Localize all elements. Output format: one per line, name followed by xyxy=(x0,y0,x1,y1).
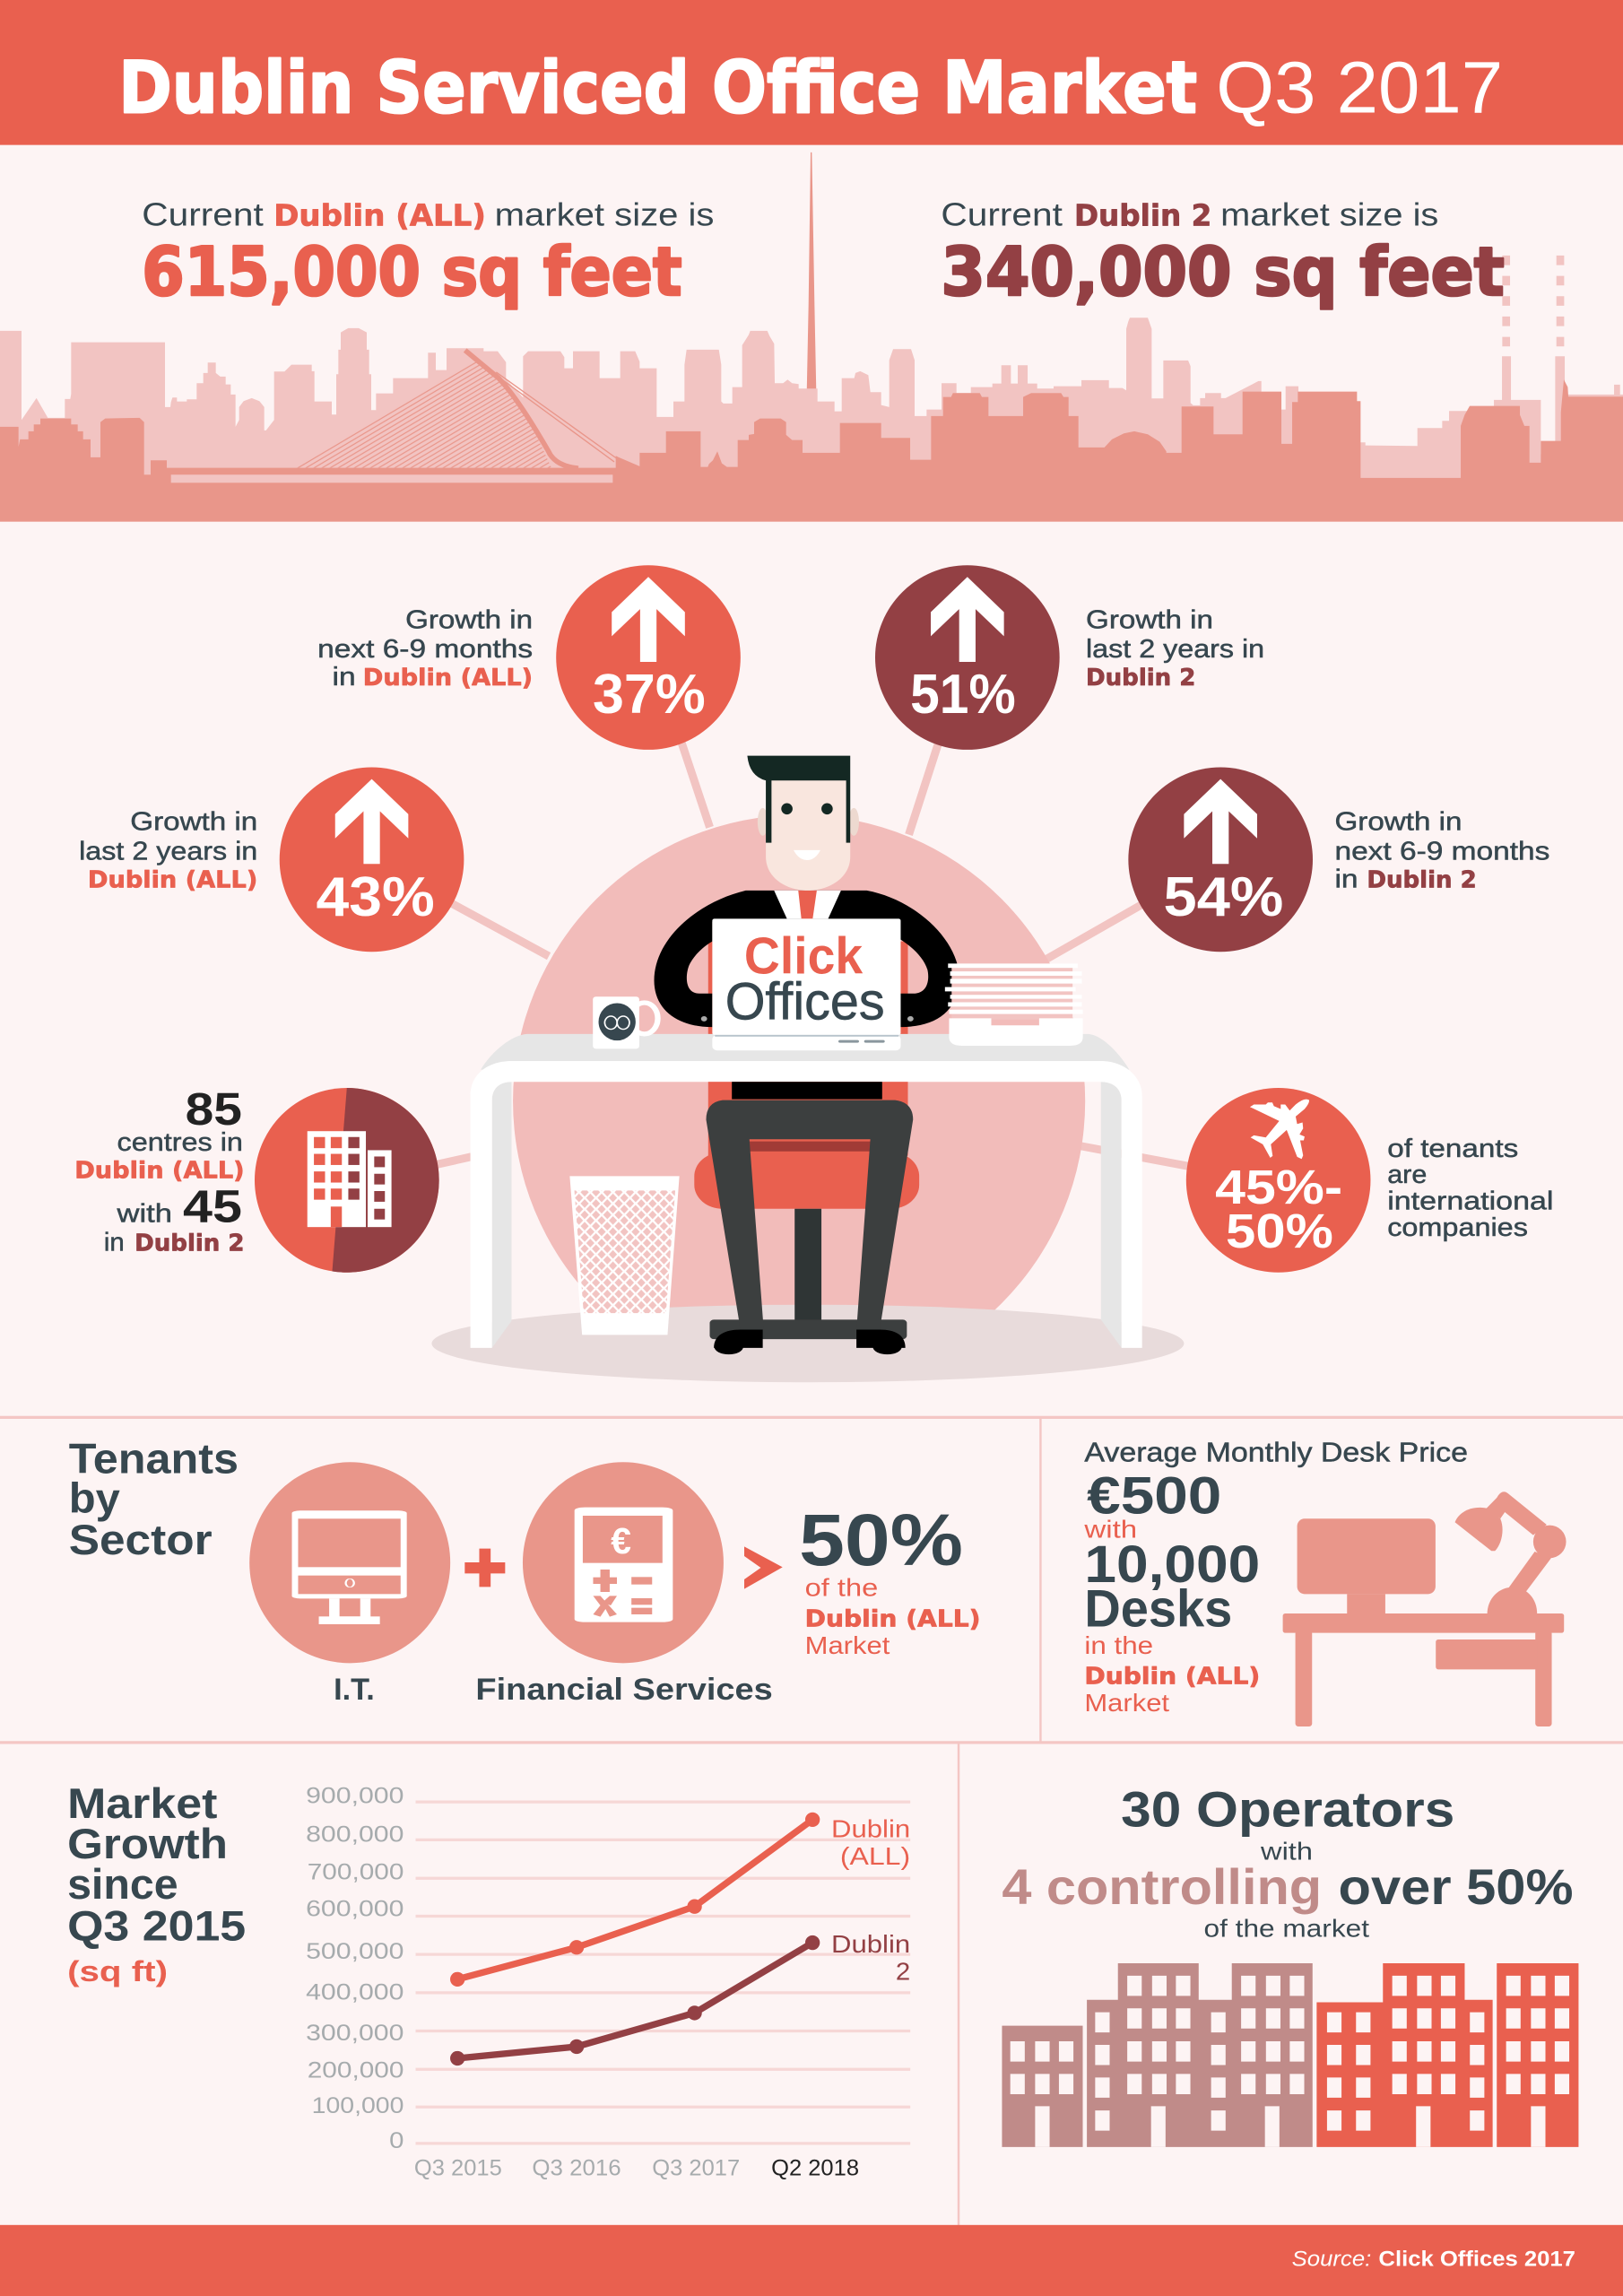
desk price text: in the xyxy=(1084,1631,1153,1659)
chair xyxy=(694,1082,919,1354)
heading: market growth: Q3 2015 xyxy=(67,1902,246,1950)
stat: 43% xyxy=(280,768,464,952)
market size: Dublin 2: 340,000 sq feet xyxy=(941,232,1505,311)
y axis labels: 800,000 xyxy=(306,1822,404,1847)
title: Dublin Serviced Office Market xyxy=(118,47,1197,130)
label: 43%: last 2 years in xyxy=(79,837,257,865)
shirt and tie xyxy=(774,891,841,918)
label: 51%: Dublin 2 xyxy=(1086,665,1195,691)
back skyline layer xyxy=(0,317,1623,522)
buildings illustration xyxy=(1002,1963,1578,2147)
head xyxy=(747,756,859,891)
label: 54%: Growth in xyxy=(1334,808,1462,837)
y axis labels: 700,000 xyxy=(308,1860,404,1885)
label: 51%: last 2 years in xyxy=(1086,635,1264,664)
x axis labels: Q3 2016 xyxy=(532,2155,621,2180)
euro sign: € xyxy=(611,1520,631,1561)
title: Q3 2017 xyxy=(1216,48,1503,129)
label: centres: Dublin 2 xyxy=(135,1230,245,1257)
desk price text: Average Monthly Desk Price xyxy=(1084,1438,1468,1467)
y axis labels: 200,000 xyxy=(308,2057,404,2083)
label: 37% xyxy=(317,605,533,691)
heading: market growth: since xyxy=(67,1861,178,1909)
coral buildings: remaining operators xyxy=(1316,1963,1578,2147)
label: 54% xyxy=(1334,808,1549,893)
y axis labels: 300,000 xyxy=(306,2021,404,2046)
label: 54%: Dublin 2 xyxy=(1367,866,1477,893)
market size: Dublin 2: Dublin 2 xyxy=(1074,198,1211,232)
label: 43%: Dublin (ALL) xyxy=(88,866,257,893)
stat: 51%: 51% xyxy=(910,664,1016,726)
stat: international tenants xyxy=(1186,1088,1370,1273)
y axis labels: 100,000 xyxy=(312,2093,404,2118)
heading: market growth: (sq ft) xyxy=(67,1954,168,1987)
y axis labels: 600,000 xyxy=(306,1896,404,1921)
shoes xyxy=(714,1330,906,1348)
spire xyxy=(805,152,818,453)
stat: 50% of market: of the xyxy=(805,1574,878,1602)
connector lines xyxy=(431,739,1193,1167)
heading: tenants by sector: by xyxy=(69,1475,121,1523)
market size: Dublin ALL: 615,000 sq feet xyxy=(142,232,682,311)
label: 37%: in xyxy=(332,663,356,691)
stat: 50% of market: Dublin (ALL) xyxy=(805,1605,981,1632)
label: 37%: Dublin (ALL) xyxy=(363,665,533,691)
market size: Dublin ALL: market size is xyxy=(495,196,714,232)
x axis labels xyxy=(414,2155,859,2180)
footer band xyxy=(0,2225,1623,2296)
stat: 43%: 43% xyxy=(317,866,435,928)
y axis labels: 900,000 xyxy=(306,1783,404,1808)
label: 37%: Growth in xyxy=(405,605,533,634)
operators text xyxy=(1002,1782,1574,1942)
market size: Dublin 2: market size is xyxy=(1220,196,1438,232)
mauve buildings: four operators xyxy=(1002,1963,1313,2147)
label: international tenants xyxy=(1387,1135,1553,1242)
stat: 51% xyxy=(875,565,1060,750)
operators text: with xyxy=(1260,1837,1313,1865)
floor shadow xyxy=(431,1305,1184,1382)
jacket and arms xyxy=(655,891,959,1027)
market size: Dublin ALL xyxy=(142,196,714,311)
laptop logo text xyxy=(725,928,885,1031)
bridge pylon and cables xyxy=(465,351,617,468)
market size: Dublin ALL: Current xyxy=(142,196,264,232)
series: Dublin ALL xyxy=(450,1813,820,1987)
desk price text: Desks xyxy=(1084,1579,1232,1638)
source credit: Click Offices 2017 xyxy=(1378,2248,1575,2271)
icon: greater than xyxy=(744,1546,783,1589)
label: centres: Dublin (ALL) xyxy=(74,1158,245,1185)
stat: 50% of market: 50% xyxy=(799,1500,963,1581)
label: 51%: Growth in xyxy=(1086,605,1213,634)
source credit: Source: xyxy=(1292,2248,1371,2271)
x axis labels: Q3 2017 xyxy=(652,2155,740,2180)
operators text: of the market xyxy=(1204,1914,1369,1942)
label: centres: 85 xyxy=(186,1083,242,1135)
y axis labels: 0 xyxy=(389,2128,404,2153)
chair back xyxy=(708,942,907,1035)
y axis labels xyxy=(306,1783,404,2153)
bridge hatch xyxy=(294,360,551,468)
paper tray xyxy=(945,963,1083,1046)
front skyline layer xyxy=(0,379,1623,522)
label: centres xyxy=(74,1083,245,1257)
heading: tenants by sector xyxy=(69,1435,239,1564)
waistband xyxy=(732,1082,882,1100)
background circle xyxy=(513,818,1085,1309)
label: international tenants: international xyxy=(1387,1187,1553,1216)
icon: plus xyxy=(464,1549,505,1587)
label: international tenants: companies xyxy=(1387,1213,1528,1242)
label: 54%: next 6-9 months xyxy=(1334,837,1549,865)
label: centres: centres in xyxy=(117,1128,243,1157)
y axis labels: 400,000 xyxy=(306,1980,404,2005)
desk price text: with xyxy=(1083,1515,1137,1543)
series labels xyxy=(831,1815,910,1985)
heading: tenants by sector: Tenants xyxy=(69,1435,239,1483)
series labels: Dublin xyxy=(831,1930,910,1958)
label: 51% xyxy=(1086,605,1264,691)
x axis labels: Q2 2018 xyxy=(771,2155,859,2180)
label: 37%: next 6-9 months xyxy=(317,635,533,664)
desk price text: 10,000 xyxy=(1084,1535,1260,1594)
heading: market growth xyxy=(67,1780,246,1987)
market size: Dublin 2 xyxy=(941,196,1505,311)
sector icons xyxy=(249,1462,783,1663)
skyline illustration xyxy=(0,152,1623,522)
desk price text xyxy=(1083,1438,1468,1717)
stat: international tenants: 50% xyxy=(1226,1205,1333,1258)
mug xyxy=(593,996,658,1048)
operators text: over 50% xyxy=(1339,1859,1574,1915)
desk price text: Market xyxy=(1084,1689,1169,1717)
desk frame xyxy=(471,1061,1142,1348)
sector labels: Financial Services xyxy=(475,1673,773,1707)
illustration: businessman at desk xyxy=(471,756,1142,1354)
y axis labels: 500,000 xyxy=(306,1939,404,1964)
laptop xyxy=(712,918,900,1050)
sector labels xyxy=(334,1673,773,1707)
market size: Dublin 2: Current xyxy=(941,196,1063,232)
desk price text: Dublin (ALL) xyxy=(1084,1663,1260,1690)
stat: 50% of market xyxy=(799,1500,981,1659)
icon: I.T. monitor xyxy=(249,1462,450,1663)
desk price text: €500 xyxy=(1087,1467,1221,1526)
stat: 37% xyxy=(556,565,741,750)
heading: market growth: Market xyxy=(67,1780,218,1828)
label: centres: 45 xyxy=(183,1181,242,1232)
stat: international tenants: 45%- xyxy=(1215,1161,1342,1214)
label: centres: in xyxy=(104,1228,125,1257)
series labels: 2 xyxy=(896,1957,910,1985)
laptop logo text: Click xyxy=(744,928,863,986)
stat: 50% of market: Market xyxy=(805,1631,890,1659)
icon: desk with lamp xyxy=(1283,1492,1567,1726)
series labels: (ALL) xyxy=(840,1842,910,1870)
stat: 37%: 37% xyxy=(593,664,706,726)
icon: plane xyxy=(1250,1100,1309,1159)
operators text: 30 Operators xyxy=(1121,1782,1454,1838)
operators text: 4 controlling xyxy=(1002,1859,1322,1915)
sector labels: I.T. xyxy=(334,1673,375,1707)
stat: 54%: 54% xyxy=(1164,866,1283,928)
line chart xyxy=(306,1783,910,2180)
icon: calculator xyxy=(523,1462,724,1663)
label: centres: with xyxy=(116,1200,172,1229)
heading: market growth: Growth xyxy=(67,1821,228,1868)
label: international tenants: of tenants xyxy=(1387,1135,1518,1163)
label: international tenants: are xyxy=(1387,1161,1427,1189)
pie icon: centres with building xyxy=(255,1088,439,1273)
laptop logo text: Offices xyxy=(725,972,885,1031)
label: 54%: in xyxy=(1334,865,1358,893)
x axis labels: Q3 2015 xyxy=(414,2155,502,2180)
series: Dublin 2 xyxy=(450,1935,820,2066)
desk top xyxy=(481,1034,1129,1070)
label: 43%: Growth in xyxy=(130,808,257,837)
waste bin xyxy=(569,1176,680,1335)
header band xyxy=(0,0,1623,145)
label: 43% xyxy=(79,808,257,893)
trousers xyxy=(706,1100,913,1330)
series labels: Dublin xyxy=(831,1815,910,1843)
source credit xyxy=(1292,2248,1575,2271)
market size: Dublin ALL: Dublin (ALL) xyxy=(273,198,486,232)
stat: 54% xyxy=(1128,768,1313,952)
heading: tenants by sector: Sector xyxy=(69,1517,213,1564)
